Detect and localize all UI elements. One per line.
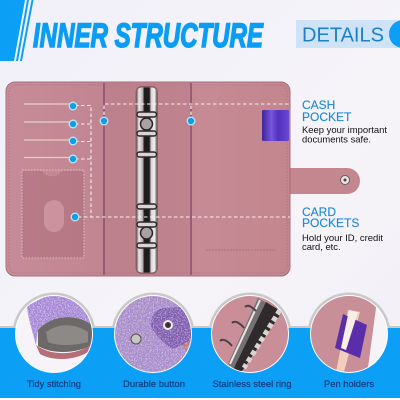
callout: cash pocket: CASH: [302, 98, 335, 112]
id card window: [22, 170, 84, 258]
details badge: [296, 20, 400, 48]
blue footer band: [0, 326, 400, 400]
detail photo: stainless steel ring: [208, 292, 292, 376]
purple pen loop: [262, 110, 289, 141]
detail photo: durable button: [112, 292, 194, 376]
binder: [6, 82, 360, 276]
callout: card pockets: Hold your ID, credit: [302, 232, 383, 243]
callout: cash pocket: POCKET: [302, 110, 352, 124]
right pocket slit: [206, 249, 276, 251]
panel dividers: [104, 83, 191, 275]
callout: card pockets: CARD: [302, 205, 336, 219]
centre panel shade: [105, 83, 190, 275]
metal ring mechanism: [136, 86, 158, 274]
callout: card pockets: card, etc.: [302, 241, 341, 252]
title: INNER STRUCTURE: [33, 17, 264, 55]
callout dots: [69, 102, 195, 221]
card slots: [24, 104, 73, 158]
binder strap tab with snap: [288, 168, 360, 194]
dashed leader lines: [75, 104, 290, 217]
callout: card pockets: POCKETS: [302, 216, 359, 230]
details badge: DETAILS: [302, 24, 384, 46]
detail photo: tidy stitching: [12, 290, 96, 376]
callout: card pockets: [302, 205, 383, 252]
callout: cash pocket: documents safe.: [302, 134, 371, 144]
label: durable button: Durable button: [123, 379, 185, 390]
label: tidy stitching: Tidy stitching: [27, 379, 81, 390]
binder cover: [6, 82, 290, 276]
outer stitching: [9, 85, 287, 273]
label: pen holders: Pen holders: [324, 379, 374, 390]
label: stainless steel ring: Stainless steel ring: [212, 379, 292, 390]
callout: cash pocket: [302, 98, 387, 144]
header graphic: blue slanted stripes: [0, 0, 34, 61]
detail photo: pen holders: [308, 292, 390, 376]
callout: cash pocket: Keep your important: [302, 124, 387, 135]
